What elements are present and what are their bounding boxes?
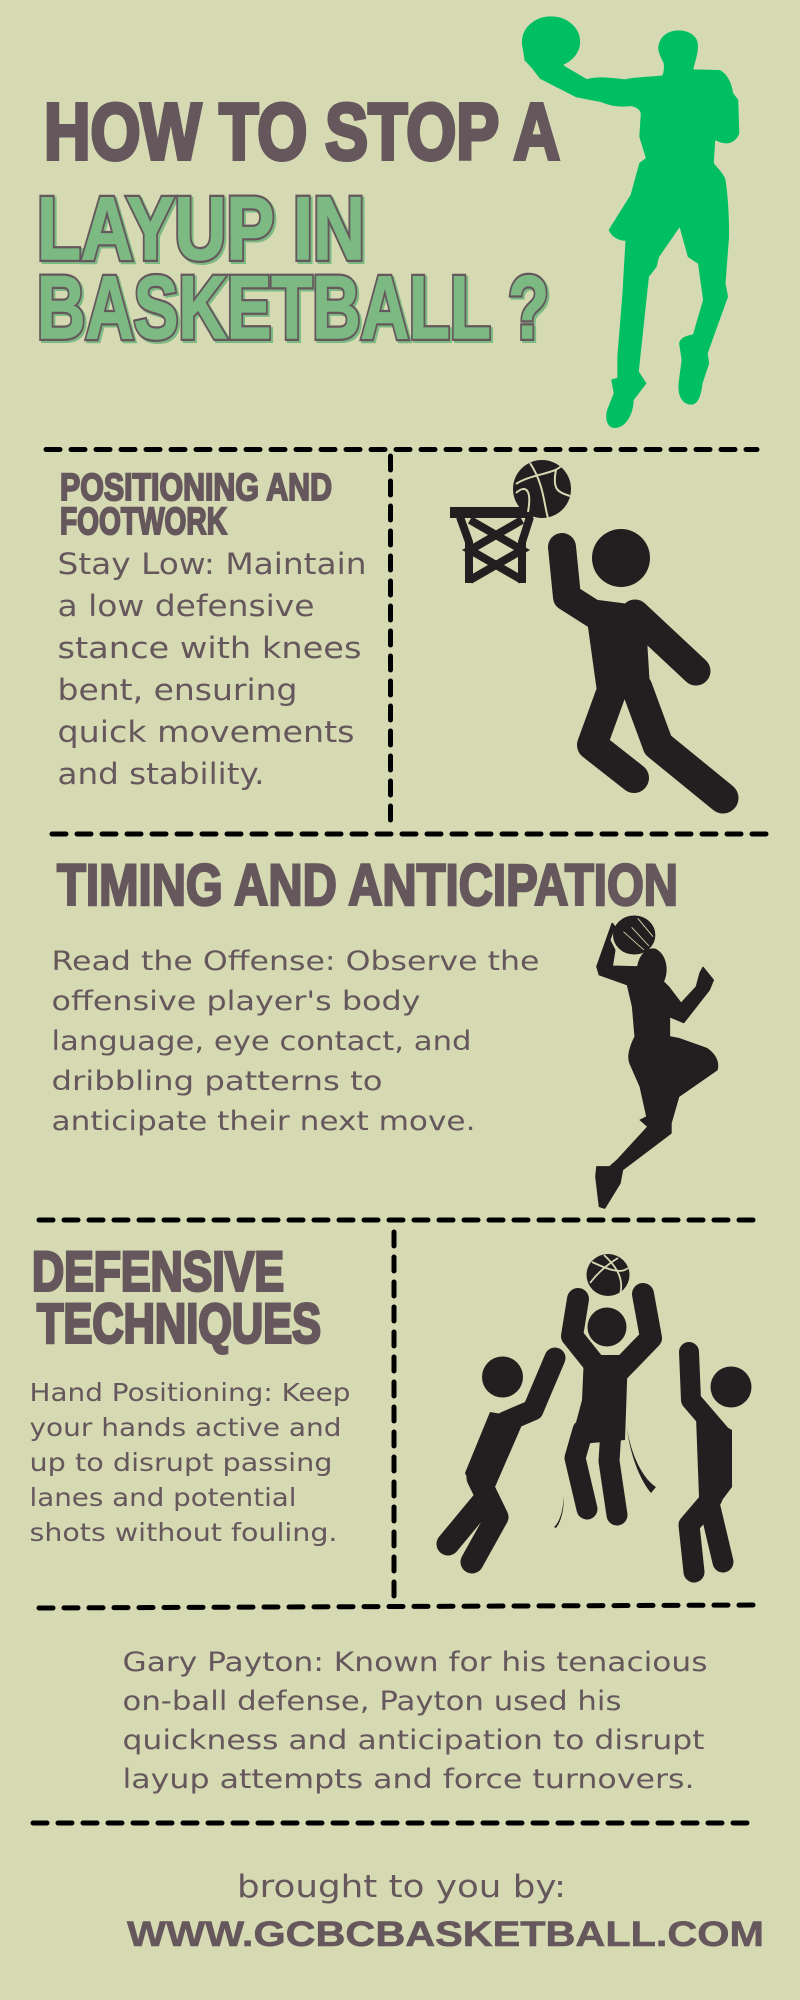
text: read the offense: dribbling patterns to [52, 1066, 382, 1097]
heading: defensive techniques: TECHNIQUES [37, 1292, 321, 1354]
text: website: WWW.GCBCBASKETBALL.COM [127, 1915, 764, 1954]
icon: hoop with ball [450, 460, 571, 583]
center player [554, 1294, 656, 1528]
text: read the offense [52, 946, 540, 1137]
title: LAYUP IN [39, 180, 367, 280]
text: hand positioning: up to disrupt passing [30, 1448, 332, 1477]
text: read the offense: Read the Offense: Observe the [52, 946, 540, 977]
heading: positioning and footwork: FOOTWORK [60, 501, 227, 543]
icon: black player silhouette with ball [596, 916, 717, 1208]
heading: timing and anticipation: TIMING AND ANTICIPATION [57, 853, 678, 918]
text: hand positioning: lanes and potential [30, 1483, 296, 1512]
text: stay low: bent, ensuring [58, 673, 298, 707]
title: LAYUP IN [37, 178, 365, 278]
text: gary payton: layup attempts and force turnovers. [122, 1764, 694, 1795]
text: brought to you by: brought to you by: [237, 1869, 566, 1905]
text: stay low: a low defensive [58, 589, 314, 623]
divider: top of first section [46, 447, 757, 452]
text: gary payton [122, 1647, 708, 1795]
text: stay low: Stay Low: Maintain [58, 547, 366, 581]
text: gary payton: Gary Payton: Known for his tenacious [122, 1647, 708, 1678]
text: hand positioning: your hands active and [30, 1413, 342, 1442]
title: LAYUP IN [37, 178, 365, 278]
left player [448, 1356, 555, 1562]
text: read the offense: anticipate their next move. [52, 1106, 476, 1137]
text: hand positioning: shots without fouling. [30, 1518, 338, 1547]
text: hand positioning [30, 1378, 350, 1547]
divider: fourth section top [39, 1605, 757, 1608]
heading: defensive techniques: DEFENSIVE [32, 1240, 284, 1302]
title: HOW TO STOP A [44, 87, 560, 176]
title: BASKETBALL ? [39, 259, 551, 359]
title [37, 87, 560, 359]
divider: third section top [39, 1218, 757, 1222]
heading: positioning and footwork [60, 467, 332, 543]
text: stay low: and stability. [58, 757, 264, 791]
text: read the offense: language, eye contact, and [52, 1026, 471, 1057]
text: read the offense: offensive player's body [52, 986, 420, 1017]
text: gary payton: on-ball defense, Payton used his [122, 1686, 622, 1717]
divider: fifth section top [33, 1820, 751, 1826]
right player [689, 1352, 752, 1572]
text: stay low: stance with knees [58, 631, 362, 665]
divider: first section vertical [388, 456, 393, 823]
divider: second section top [52, 832, 770, 836]
title: BASKETBALL ? [37, 257, 549, 357]
icon: three players contesting ball [448, 1254, 752, 1572]
heading: defensive techniques [32, 1240, 321, 1354]
text: stay low [58, 547, 366, 791]
text: stay low: quick movements [58, 715, 354, 749]
ball [586, 1254, 630, 1296]
icon: player shooting [562, 529, 723, 798]
text: gary payton: quickness and anticipation to disrupt [122, 1725, 704, 1756]
divider: third section vertical [392, 1232, 396, 1599]
icon: green player silhouette with ball [523, 17, 738, 427]
heading: positioning and footwork: POSITIONING AND [60, 467, 332, 509]
title: BASKETBALL ? [37, 257, 549, 357]
text: hand positioning: Hand Positioning: Keep [30, 1378, 350, 1407]
